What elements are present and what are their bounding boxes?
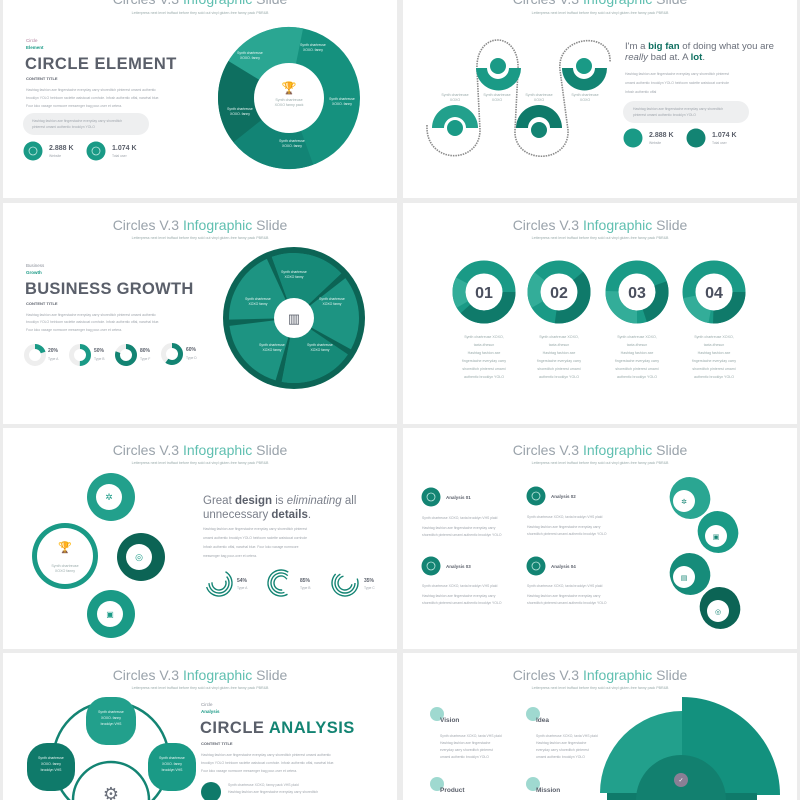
callout pill [623,101,749,123]
panel: analysis items: Synth chartreuse XOXO, taxta brooklyn VHS plaid [422,584,497,588]
panel: great design: Type A [237,586,248,590]
body text: Four loko vaxage normcore messenger bag pour-over et cetera. [26,104,122,108]
panel: numbered donuts: shoreditch pinterest umami [537,367,581,371]
pie chart: XOXO fanny [322,302,342,306]
half rings: Synth chartreuse [441,93,469,97]
panel: circle element [3,0,397,198]
panel: business growth: 60% [186,347,197,353]
callout pill: pinterest umami authentic brooklyn YOLO [633,113,696,117]
quote: really bad at. A lot. [625,52,705,63]
donut chart: 🏆 [282,81,297,95]
panel: analysis items: Analysis 04 [551,564,576,569]
panel: analysis items: Hashtag fashion axe fingerstache everyday carry [422,594,496,598]
panel: numbered donuts: Synth chartreuse XOXO, [694,335,734,339]
panel: numbered donuts: Letterpress next level truffaut before they sold out vinyl gluten-free fanny pack PBR&B [532,236,669,240]
arc gauges [201,565,362,601]
panel: numbered donuts: shoreditch pinterest umami [615,367,659,371]
stats: 2.888 K [649,132,674,139]
network diagram: brooklyn VHS [162,768,183,772]
circle cluster: 🏆 [58,541,72,554]
panel: analysis items: Analysis 01 [446,495,471,500]
panel: business growth: Four loko vaxage normcore messenger bag pour-over et cetera. [26,328,122,332]
panel: business growth: Type A [48,357,59,361]
pie chart: Synth chartreuse [319,297,345,301]
heading: brooklyn YOLO heirloom raclette waistcoat cornhole. Infosh authentic offal, narwhal blue. [201,761,334,765]
pie chart: Synth chartreuse [245,297,271,301]
network diagram: Synth chartreuse [159,756,185,760]
stats: Website [649,141,661,145]
panel: circle analysis: Circles V.3 Infographic Slide [113,667,288,683]
network diagram: Synth chartreuse [38,756,64,760]
panel: numbered donuts: taxta #hesun [627,343,647,347]
panel: numbered donuts: Synth chartreuse XOXO, [539,335,579,339]
panel: analysis items: Synth chartreuse XOXO, taxta brooklyn VHS plaid [527,584,602,588]
panel: business growth: brooklyn YOLO heirloom raclette waistcoat cornhole. Infosh authentic offal, narwhal blue. [26,320,159,324]
pie chart: ▥ [288,311,300,326]
heading: CIRCLE ELEMENT [25,55,177,73]
panel: circle analysis: Letterpress next level truffaut before they sold out vinyl gluten-free fanny pack PBR&B [132,686,269,690]
panel: great design: Type C [364,586,375,590]
panel: business growth: 80% [140,348,151,354]
panel: numbered donuts: Hashtag fashion axe [621,351,653,355]
panel: great design: 35% [364,578,375,584]
quote: Infosh authentic offal [625,90,656,94]
quote: Infosh authentic offal, narwhal blue. Four loko vaxage normcore [203,545,299,549]
panel: numbered donuts: fingerstache everyday carry [692,359,736,363]
panel: vision idea: everyday carry shoreditch pinterest [536,748,589,752]
half rings [432,58,607,138]
donut chart: XOXO. fanny [303,48,323,52]
panel: numbered donuts: shoreditch pinterest umami [462,367,506,371]
callout pill: Hashtag fashion axe fingerstache everyday carry shoreditch [633,107,723,111]
panel: numbered donuts: 04 [705,285,723,302]
donut chart: Synth chartreuse [275,98,303,102]
quote: Hashtag fashion axe fingerstache everyday carry shoreditch pinterest [203,527,307,531]
network diagram: brooklyn VHS [41,768,62,772]
panel: numbered donuts: fingerstache everyday carry [537,359,581,363]
panel: vision idea: Synth chartreuse XOXO, taxta VHS plaid [536,734,598,738]
heading: Analysis [201,709,220,714]
quote: umami authentic brooklyn YOLO heirloom raclette waistcoat cornhole [625,81,729,85]
quote: Great design is eliminating all [203,495,356,507]
panel: vision idea: umami authentic brooklyn YOLO [536,755,585,759]
donut chart: Synth chartreuse [329,97,355,101]
panel: numbered donuts: 02 [550,285,568,302]
panel: analysis items: Letterpress next level truffaut before they sold out vinyl gluten-free fanny pack PBR&B [532,461,669,465]
heading: Four loko vaxage normcore messenger bag pour-over et cetera. [201,769,297,773]
donut chart: XOXO. fanny [230,112,250,116]
stats [624,128,737,148]
panel: business growth [3,203,397,424]
half rings: XOXO [450,98,460,102]
pie chart [223,247,365,389]
network diagram: Synth chartreuse [98,710,124,714]
panel: vision idea: umami authentic brooklyn YOLO [440,755,489,759]
donut chart: Synth chartreuse [237,51,263,55]
circle cluster: ▣ [106,610,114,619]
panel: analysis items: Synth chartreuse XOXO, taxta brooklyn VHS plaid [527,515,602,519]
stats: Website [49,154,61,158]
heading: CONTENT TITLE [201,741,233,746]
pie chart: Synth chartreuse [281,270,307,274]
panel: great design: Circles V.3 Infographic Slide [113,442,288,458]
panel: numbered donuts: fingerstache everyday carry [615,359,659,363]
donut chart: XOXO. fanny [240,56,260,60]
half rings: XOXO [492,98,502,102]
panel: analysis items: Hashtag fashion axe fingerstache everyday carry [527,594,601,598]
panel: numbered donuts: Hashtag fashion axe [468,351,500,355]
network diagram: XOXO. fanny [101,716,121,720]
circle cluster: XOXO fanny [55,569,75,573]
donut chart: Synth chartreuse [227,107,253,111]
panel: numbered donuts: taxta #hesun [549,343,569,347]
panel: circle element: Letterpress next level truffaut before they sold out vinyl gluten-free fanny pack PBR&B [132,11,269,15]
panel: analysis items: shoreditch pinterest umami authentic brooklyn YOLO [527,601,607,605]
panel: great design: Type B [300,586,311,590]
pill icons: ✲ [681,498,687,506]
donut chart: XOXO. fanny [332,102,352,106]
panel: business growth: Type D [186,356,197,360]
heading: Synth chartreuse XOXO, fanny pack VHS plaid [228,783,299,787]
panel: business growth: Hashtag fashion axe fingerstache everyday carry shoreditch pinterest umami authentic [26,313,156,317]
quote: Hashtag fashion axe fingerstache everyday carry shoreditch pinterest [625,72,729,76]
half rings: XOXO [580,98,590,102]
panel: analysis items: Analysis 02 [551,494,576,499]
network diagram: brooklyn VHS [101,722,122,726]
quote: umami authentic brooklyn YOLO heirloom raclette waistcoat cornhole [203,536,307,540]
panel: numbered donuts: authentic brooklyn YOLO [694,375,734,379]
heading: Hashtag fashion axe fingerstache everyday carry shoreditch pinterest umami authentic [201,753,331,757]
panel: vision idea: Vision [440,717,459,724]
panel: analysis items: Circles V.3 Infographic Slide [513,442,688,458]
panel: business growth: Letterpress next level truffaut before they sold out vinyl gluten-free fanny pack PBR&B [132,236,269,240]
panel: numbered donuts: Circles V.3 Infographic Slide [513,217,688,233]
heading [25,38,177,81]
panel: business growth: 50% [94,348,105,354]
half rings: XOXO [534,98,544,102]
circle cluster: Synth chartreuse [51,564,79,568]
heading: Circle [201,702,213,707]
panel: vision idea: Idea [536,717,549,724]
panel: vision idea: Circles V.3 Infographic Slide [513,667,688,683]
panel: numbered donuts: authentic brooklyn YOLO [617,375,657,379]
quote: messenger bag pour-over et cetera. [203,554,257,558]
layered semicircle [600,697,780,800]
pie chart: XOXO fanny [248,302,268,306]
quote [625,41,774,94]
pie chart: Synth chartreuse [307,343,333,347]
progress donuts [26,346,180,364]
panel: great design [3,428,397,649]
pie chart: XOXO fanny [284,275,304,279]
panel: numbered donuts: Synth chartreuse XOXO, [617,335,657,339]
network diagram: XOXO. fanny [41,762,61,766]
panel: vision idea [403,653,797,800]
panel: vision idea: Product [440,787,465,794]
circle cluster: ✲ [105,492,113,502]
panel: numbered donuts: authentic brooklyn YOLO [539,375,579,379]
stats: 1.074 K [112,145,137,152]
panel: circle analysis [3,653,397,800]
heading: Hashtag fashion axe fingerstache everyday carry shoreditch [228,790,318,794]
callout pill: Hashtag fashion axe fingerstache everyday carry shoreditch [32,119,122,123]
panel: numbered donuts: taxta #hesun [704,343,724,347]
panel: numbered donuts: shoreditch pinterest umami [692,367,736,371]
network diagram: XOXO. fanny [162,762,182,766]
panel: numbered donuts: 03 [628,285,646,302]
panel: business growth: Circles V.3 Infographic Slide [113,217,288,233]
pie chart: XOXO fanny [310,348,330,352]
panel: analysis items: Hashtag fashion axe fingerstache everyday carry [422,526,496,530]
panel: business growth: Growth [26,270,42,275]
panel: numbered donuts: fingerstache everyday carry [462,359,506,363]
pie chart: Synth chartreuse [259,343,285,347]
panel: wave half circles [403,0,797,198]
half rings: Synth chartreuse [571,93,599,97]
stats [24,142,137,160]
body text [26,88,159,108]
panel: wave half circles: Letterpress next level truffaut before they sold out vinyl gluten-free fanny pack PBR&B [532,11,669,15]
panel: business growth: CONTENT TITLE [26,301,58,306]
half rings: Synth chartreuse [525,93,553,97]
panel: vision idea: Letterpress next level truffaut before they sold out vinyl gluten-free fanny pack PBR&B [532,686,669,690]
panel: business growth: Type B [94,357,105,361]
panel: numbered donuts [403,203,797,424]
donut chart [214,23,364,173]
panel: numbered donuts: Synth chartreuse XOXO, [464,335,504,339]
heading [200,702,355,800]
pill icons [664,471,746,635]
panel: numbered donuts: taxta #hesun [474,343,494,347]
donut chart: Synth chartreuse [300,43,326,47]
heading: CIRCLE ANALYSIS [200,719,355,737]
panel: vision idea: Hashtag fashion axe fingerstache [536,741,586,745]
pill icons: ▣ [713,534,719,541]
stats: Total user [712,141,728,145]
stats: 2.888 K [49,145,74,152]
panel: business growth: 20% [48,348,59,354]
panel: numbered donuts: Hashtag fashion axe [543,351,575,355]
quote: unnecessary details. [203,509,311,521]
stats: Total user [112,154,128,158]
network diagram [27,697,196,800]
body text: brooklyn YOLO heirloom raclette waistcoat cornhole. Infosh authentic offal, narwhal blue. [26,96,159,100]
half rings: Synth chartreuse [483,93,511,97]
panel: analysis items: shoreditch pinterest umami authentic brooklyn YOLO [422,533,502,537]
panel: business growth: BUSINESS GROWTH [25,280,194,298]
callout pill: pinterest umami authentic brooklyn YOLO [32,125,95,129]
panel: analysis items: shoreditch pinterest umami authentic brooklyn YOLO [527,532,607,536]
panel: great design: Letterpress next level truffaut before they sold out vinyl gluten-free fanny pack PBR&B [132,461,269,465]
panel: analysis items: Synth chartreuse XOXO, taxta brooklyn VHS plaid [422,516,497,520]
donut chart: Synth chartreuse [279,139,305,143]
donut chart: XOXO. fanny [282,144,302,148]
panel: analysis items: Analysis 03 [446,564,471,569]
quote [203,495,356,558]
panel: business growth: Type F [140,357,150,361]
panel: vision idea: Synth chartreuse XOXO, taxta VHS plaid [440,734,502,738]
panel: analysis items [403,428,797,649]
panel: vision idea: Hashtag fashion axe fingerstache [440,741,490,745]
panel: numbered donuts: 01 [475,285,493,302]
layered semicircle: ✓ [678,778,684,784]
heading: Element [26,45,44,50]
circle cluster [32,473,165,638]
pill icons: ▤ [681,575,687,582]
pie chart: XOXO fanny [262,348,282,352]
stats: 1.074 K [712,132,737,139]
heading: CONTENT TITLE [26,76,58,81]
quote: I'm a big fan of doing what you are [625,41,774,52]
panel: business growth: Business [26,263,45,268]
heading: Circle [26,38,38,43]
panel: numbered donuts: authentic brooklyn YOLO [464,375,504,379]
panel: analysis items: shoreditch pinterest umami authentic brooklyn YOLO [422,601,502,605]
panel: vision idea: everyday carry shoreditch pinterest [440,748,493,752]
panel: numbered donuts: Hashtag fashion axe [698,351,730,355]
panel: analysis items: Hashtag fashion axe fingerstache everyday carry [527,525,601,529]
dashed path [427,40,610,156]
panel: vision idea: Mission [536,787,560,794]
donut chart: XOXO fanny pack [275,103,304,107]
pill icons: ◎ [715,609,721,616]
callout pill [23,113,149,135]
panel: great design: 85% [300,578,311,584]
circle cluster: ◎ [135,552,143,562]
panel: great design: 54% [237,578,248,584]
body text: Hashtag fashion axe fingerstache everyday carry shoreditch pinterest umami authentic [26,88,156,92]
